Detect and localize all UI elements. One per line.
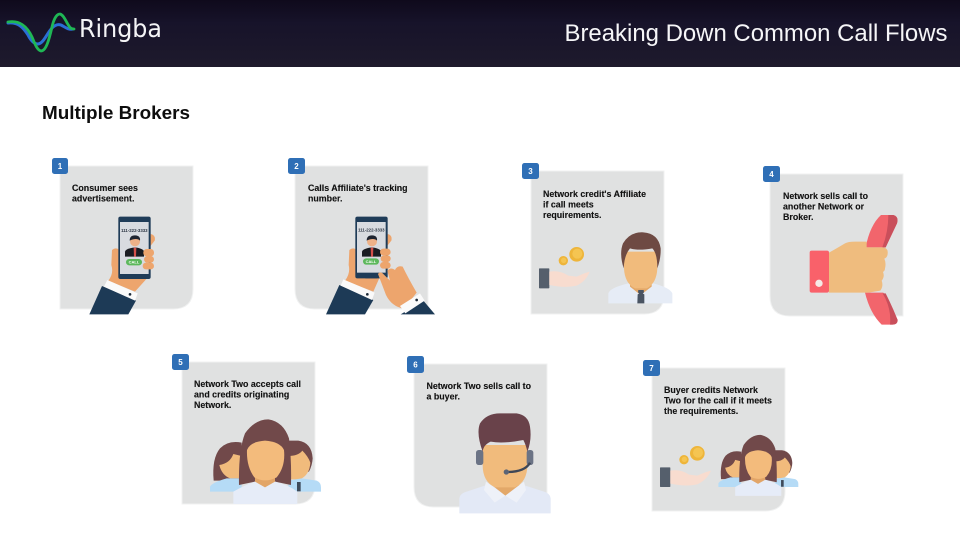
step 1 text: Consumer sees [72, 183, 138, 193]
step 7 text: Two for the call if it meets [664, 396, 772, 406]
step 5 text: Network Two accepts call [194, 379, 301, 389]
step 7 badge: 7 [649, 364, 654, 373]
step 7 text: Buyer credits Network [664, 385, 758, 395]
panel: step 4 [763, 166, 903, 325]
step 6 badge: 6 [413, 360, 418, 370]
panel: step 5 [172, 354, 321, 504]
step 7 text: the requirements. [664, 406, 738, 416]
step 1 badge [52, 158, 68, 174]
icon: hand receiving coins [660, 446, 711, 487]
panel: step 6 [407, 356, 551, 513]
icon: team of three [718, 435, 798, 496]
step 1 badge: 1 [58, 162, 63, 171]
step 4 badge [763, 166, 780, 182]
step 3 badge [522, 163, 539, 179]
step 5 text: Network. [194, 400, 231, 410]
step 6 text: a buyer. [426, 392, 460, 402]
step 4 badge: 4 [769, 170, 774, 179]
step 3 badge: 3 [528, 167, 533, 176]
step 5 badge [172, 354, 189, 370]
header band [0, 0, 960, 67]
icon: businessman [608, 232, 672, 303]
step 2 text: Calls Affiliate's tracking [308, 183, 408, 193]
step 6 badge [407, 356, 424, 373]
step 1 text: advertisement. [72, 194, 134, 204]
icon: hand receiving coins [539, 247, 590, 288]
step 5 text: and credits originating [194, 390, 289, 400]
step 3 text: requirements. [543, 210, 602, 220]
icon: hand holding telephone handset [810, 215, 898, 325]
icon: hand holding phone [89, 217, 155, 314]
step 2 badge [288, 158, 305, 174]
step 7 badge [643, 360, 660, 376]
icon: hand holding phone: 111-222-3333 [121, 228, 148, 233]
panel: step 2 [288, 158, 435, 314]
icon: hands dialling phone: CALL [366, 259, 377, 264]
icon: team of three [210, 419, 321, 504]
panel: step 3 [522, 163, 672, 314]
icon: hand holding phone: CALL [129, 260, 140, 265]
step 4 text: another Network or [783, 202, 865, 212]
icon: call agent with headset [459, 413, 551, 513]
step 3 text: if call meets [543, 200, 594, 210]
section heading: Multiple Brokers [42, 103, 190, 123]
icon: hands dialling phone: 111-222-3333 [358, 227, 385, 232]
panel: step 1 [52, 158, 193, 314]
step 5 badge: 5 [178, 358, 183, 367]
step 2 badge: 2 [294, 162, 299, 171]
page title: Breaking Down Common Call Flows [564, 20, 948, 47]
step 3 text: Network credit's Affiliate [543, 189, 646, 199]
logo wordmark: Ringba [79, 14, 162, 43]
panel: step 7 [643, 360, 798, 511]
step 2 text: number. [308, 194, 342, 204]
step 4 text: Network sells call to [783, 191, 869, 201]
step 4 text: Broker. [783, 212, 813, 222]
logo: Ringba wave [8, 14, 74, 51]
step 6 text: Network Two sells call to [426, 381, 532, 391]
icon: hands dialling phone [326, 217, 435, 314]
